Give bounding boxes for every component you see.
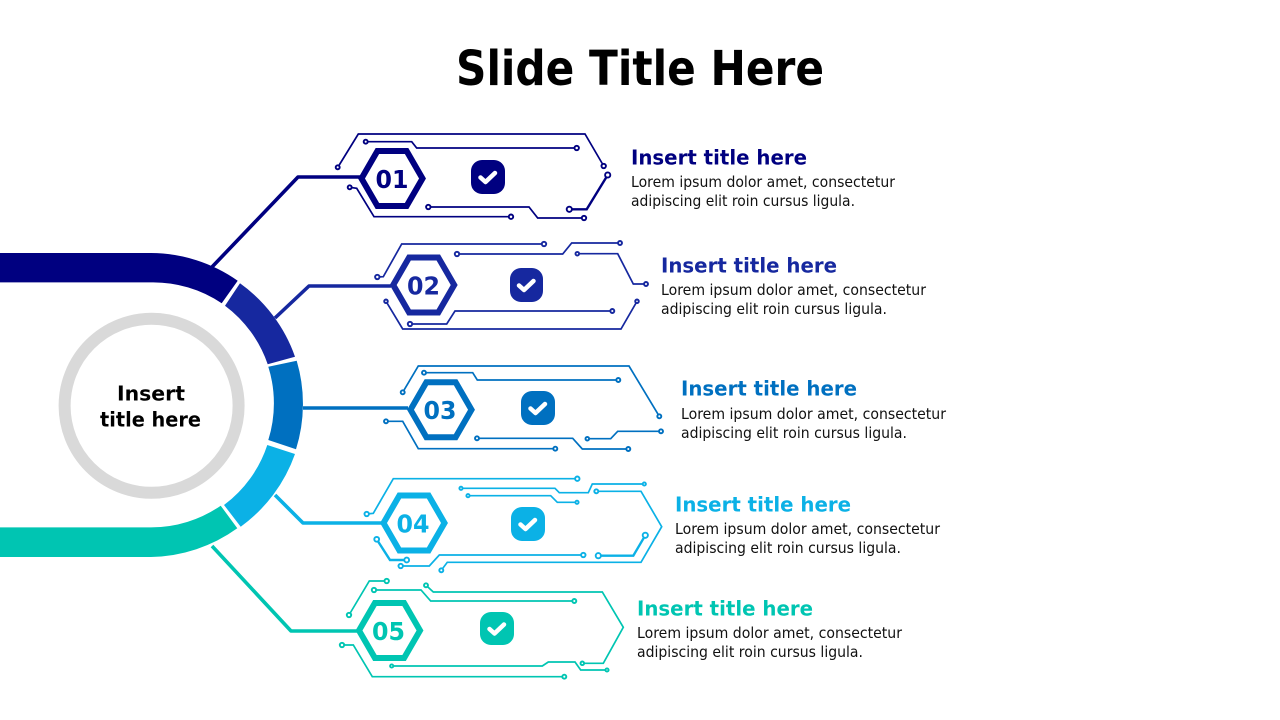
icon: check badge 04: [511, 507, 545, 541]
panel: item 05: [212, 546, 903, 679]
icon: check badge 01: [471, 160, 505, 194]
hexagon 01: [362, 151, 422, 206]
icon: check badge 05: [480, 612, 514, 645]
text block 03: Insert title here: [681, 376, 857, 400]
text block 03: adipiscing elit roin cursus ligula.: [681, 424, 907, 442]
circuit lines 03: [384, 366, 663, 451]
connector 01: [212, 177, 360, 267]
text block 05: adipiscing elit roin cursus ligula.: [637, 643, 863, 661]
icon: check badge 02: [510, 268, 543, 302]
circuit lines 02: [375, 241, 648, 329]
text block 01: Insert title here: [631, 146, 807, 170]
connector 05: [212, 546, 358, 631]
panel: item 02: [275, 241, 927, 329]
circuit lines 04: [364, 476, 662, 572]
centre label: Insert: [117, 382, 185, 406]
centre label: title here: [100, 408, 201, 432]
panel: item 03: [303, 366, 947, 451]
circuit lines 05: [340, 579, 623, 679]
centre label: [100, 382, 201, 432]
text block 02: [661, 254, 927, 318]
hexagon 03: [410, 382, 472, 437]
hexagon 04: [384, 496, 444, 550]
arc segment 3: [268, 361, 303, 449]
text block 04: Insert title here: [675, 492, 851, 516]
text block 05: [637, 596, 903, 661]
text block 01: Lorem ipsum dolor amet, consectetur: [631, 173, 896, 191]
panel: central hub: [0, 253, 303, 557]
text block 04: Lorem ipsum dolor amet, consectetur: [675, 520, 941, 538]
connector 04: [275, 495, 382, 523]
text block 05: Lorem ipsum dolor amet, consectetur: [637, 624, 903, 642]
panel: item 04: [275, 476, 941, 572]
panel: item 01: [212, 134, 896, 267]
text block 04: [675, 492, 941, 557]
arc segment 5 with bottom bar: [0, 506, 237, 557]
hexagon 05: [359, 603, 420, 658]
number 05: 05: [372, 617, 405, 646]
text block 03: Lorem ipsum dolor amet, consectetur: [681, 405, 947, 423]
text block 03: [681, 376, 947, 442]
number 03: 03: [424, 396, 456, 425]
text block 02: Insert title here: [661, 254, 837, 278]
number 02: 02: [407, 271, 440, 300]
centre ring: [65, 319, 239, 493]
title: Slide Title Here: [456, 41, 824, 97]
text block 04: adipiscing elit roin cursus ligula.: [675, 539, 901, 557]
arc segment 2: [225, 283, 295, 364]
text block 01: [631, 146, 896, 210]
number 04: 04: [396, 509, 430, 538]
text block 01: adipiscing elit roin cursus ligula.: [631, 192, 855, 210]
arc segment 4: [224, 445, 295, 527]
number 01: 01: [376, 165, 408, 194]
arc segment 1 with top bar: [0, 253, 238, 303]
text block 02: adipiscing elit roin cursus ligula.: [661, 300, 887, 318]
text block 02: Lorem ipsum dolor amet, consectetur: [661, 281, 927, 299]
circuit lines 01: [336, 134, 610, 220]
connector 02: [275, 286, 391, 318]
icon: check badge 03: [521, 391, 555, 425]
text block 05: Insert title here: [637, 596, 813, 620]
hexagon 02: [393, 258, 454, 312]
connector 03: [303, 406, 408, 410]
